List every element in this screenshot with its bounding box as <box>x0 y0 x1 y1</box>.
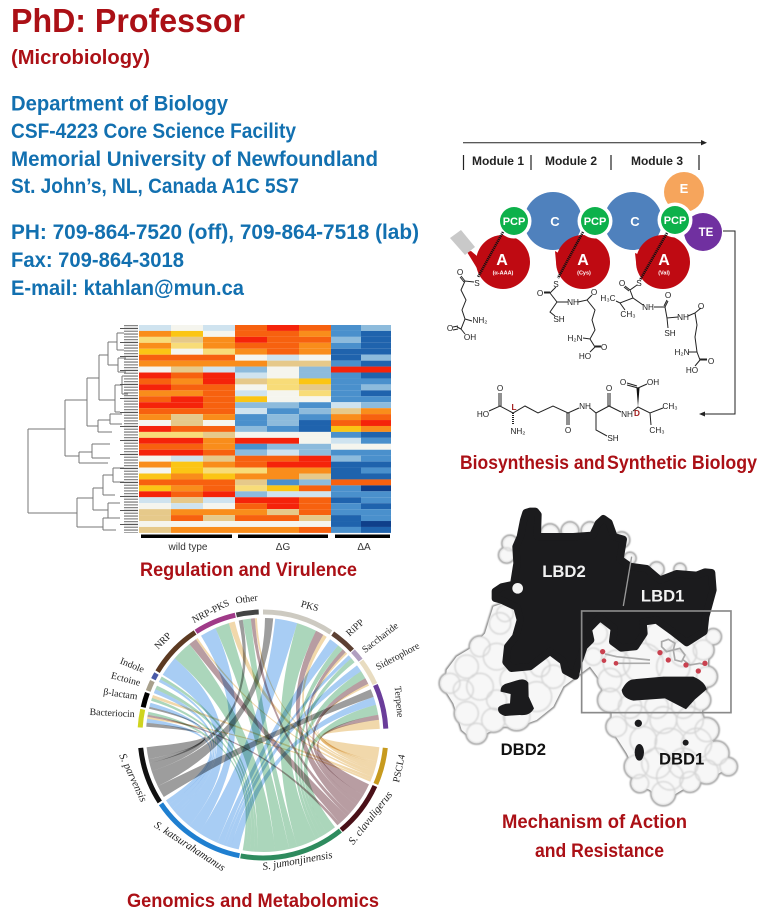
structure: module 3 intermediate: HO <box>686 366 698 375</box>
structure: module 2 intermediate: S <box>553 280 559 289</box>
domain labels: DBD1 <box>659 749 704 768</box>
structure: final product: D <box>634 409 640 418</box>
domain divider <box>623 557 632 606</box>
panel: genomics and metabolomics <box>89 592 422 912</box>
chart: outer track segments <box>140 612 386 858</box>
protein surface <box>440 523 737 805</box>
heading: genomics and metabolomics: Genomics and Metabolomics <box>127 891 379 912</box>
heading: biosynthesis and synthetic biology <box>460 453 757 474</box>
structure: module 1 intermediate: S <box>474 279 480 288</box>
domain letters: C <box>550 214 560 229</box>
domain letters: (Cys) <box>577 270 591 276</box>
chart labels: RiPP <box>344 617 367 639</box>
black cross-section: LBD lower <box>622 677 707 709</box>
structure: module 2 intermediate: H₂N <box>567 334 583 343</box>
text block: contact details: E-mail: ktahlan@mun.ca <box>11 277 244 300</box>
chart labels: S. jumonjinensis <box>262 849 333 873</box>
phosphopantetheine arms <box>478 232 667 280</box>
protein structure <box>440 511 737 805</box>
icon: TE domain <box>684 213 722 251</box>
PCP white halos <box>496 202 692 238</box>
panel: biosynthesis and synthetic biology <box>447 140 757 474</box>
structure: final product <box>477 378 678 443</box>
icon: PCP domains: PCP <box>584 216 606 228</box>
text block: address: St. John’s, NL, Canada A1C 5S7 <box>11 175 299 198</box>
domain letters: C <box>630 214 640 229</box>
chart labels: Siderophore <box>374 640 422 673</box>
icon: E domain <box>664 172 704 212</box>
domain labels: LBD1 <box>641 587 684 606</box>
chart labels: NRP-PKS <box>190 598 231 626</box>
structure: final product: OH <box>647 378 659 387</box>
chart labels: Ectoine <box>110 670 142 689</box>
domain letters: TE <box>699 227 714 239</box>
title: PhD: Professor <box>11 2 245 39</box>
module ticks <box>464 155 699 170</box>
structure: final product: CH₃ <box>662 402 678 411</box>
text block: address: CSF-4223 Core Science Facility <box>11 120 296 143</box>
heading: mechanism of action and resistance: and Resistance <box>535 841 664 862</box>
structure: module 1 intermediate: NH₂ <box>472 316 488 325</box>
module labels <box>472 154 683 168</box>
structure: module 1 intermediate: O <box>447 324 453 333</box>
chart labels: PKS <box>300 599 320 614</box>
chart labels: β-lactam <box>103 687 138 702</box>
module labels: Module 3 <box>631 154 683 168</box>
structure: module 2 intermediate: NH <box>567 298 579 307</box>
panel: regulation and virulence <box>28 325 391 581</box>
domain labels: LBD2 <box>542 562 586 581</box>
axis labels <box>168 542 371 553</box>
chart labels: S. parvensis <box>116 752 149 804</box>
black cross-section: LBD <box>495 511 713 676</box>
structure: module 3 intermediate: NH <box>642 303 654 312</box>
chart: chord ribbons <box>146 618 380 852</box>
chart: dendrogram <box>28 325 131 533</box>
chart: heatmap <box>139 325 391 533</box>
ligand <box>600 639 708 674</box>
structure: module 1 intermediate: O <box>457 268 463 277</box>
icon: red A domains <box>467 235 690 289</box>
icon: grey substrate block <box>450 230 475 255</box>
domain labels <box>501 562 704 768</box>
heading: mechanism of action and resistance: Mechanism of Action <box>502 812 687 833</box>
icon: PCP domains: PCP <box>503 216 525 228</box>
text block: contact details: Fax: 709-864-3018 <box>11 249 184 272</box>
structure: final product: NH <box>621 410 633 419</box>
structure: module 2 intermediate <box>537 280 607 361</box>
axis labels: wild type <box>168 542 208 553</box>
structure: module 1 intermediate: OH <box>464 333 476 342</box>
structure: module 3 intermediate: H₂N <box>674 348 690 357</box>
chart labels: Indole <box>118 656 146 676</box>
icon: C domains <box>524 192 662 250</box>
structure: final product: O <box>620 378 626 387</box>
chart labels: Saccharide <box>360 620 401 656</box>
domain letters: A <box>496 252 508 269</box>
structure: final product: L <box>511 403 517 412</box>
structure: final product: NH₂ <box>510 427 526 436</box>
structure: module 2 intermediate: O <box>537 289 543 298</box>
structure: final product: O <box>606 384 612 393</box>
chart labels: PSCL4 <box>391 753 408 783</box>
heading: mechanism of action and resistance <box>502 812 687 862</box>
binding site box <box>582 611 731 713</box>
text block: contact details: PH: 709-864-7520 (off), 709-864-7518 (lab) <box>11 221 419 244</box>
structure: module 3 intermediate: O <box>665 291 671 300</box>
structure: module 3 intermediate: NH <box>677 313 689 322</box>
chart labels: Other <box>235 592 259 607</box>
structure: module 3 intermediate: SH <box>664 329 676 338</box>
black cross-section: DBD2 <box>498 679 534 716</box>
domain letters: (α-AAA) <box>493 270 514 276</box>
structure: final product: NH <box>579 402 591 411</box>
chart labels: NRP <box>153 630 174 652</box>
black cavities <box>635 720 689 761</box>
domain letters <box>493 181 714 276</box>
white pocket in LBD <box>512 583 523 594</box>
domain letters: A <box>577 252 589 269</box>
icon: PCP domains: PCP <box>664 215 686 227</box>
domain labels: DBD2 <box>501 740 546 759</box>
text block: address <box>11 92 378 198</box>
structure: final product: SH <box>607 434 619 443</box>
structure: module 3 intermediate: CH₃ <box>620 310 636 319</box>
arrow: assembly line direction <box>463 140 707 145</box>
structure: final product: O <box>497 384 503 393</box>
structure: module 3 intermediate: O <box>619 279 625 288</box>
structure: module 2 intermediate: O <box>601 343 607 352</box>
chart labels: Bacteriocin <box>89 707 135 720</box>
axis labels: ΔG <box>276 542 290 553</box>
structure: module 2 intermediate: O <box>591 288 597 297</box>
structure: final product: CH₃ <box>649 426 665 435</box>
group bars <box>141 534 390 538</box>
heading: regulation and virulence: Regulation and Virulence <box>140 560 357 581</box>
heading: biosynthesis and synthetic biology: Biosynthesis and <box>460 453 605 474</box>
panel: mechanism of action and resistance <box>440 511 737 862</box>
chart labels <box>89 592 422 874</box>
structure: module 3 intermediate <box>600 279 714 375</box>
text block: address: Department of Biology <box>11 92 228 116</box>
structure: module 3 intermediate: O <box>698 302 704 311</box>
chart labels: S. clavuligerus <box>346 789 395 847</box>
structure: final product: O <box>565 426 571 435</box>
heading: biosynthesis and synthetic biology: Synthetic Biology <box>607 453 757 474</box>
chart labels: S. katsurahamanus <box>152 819 227 874</box>
domain letters: E <box>680 181 689 196</box>
chart labels: Terpene <box>392 686 405 719</box>
domain letters: A <box>658 252 670 269</box>
domain letters: (Val) <box>658 270 670 276</box>
structure: module 3 intermediate: S <box>636 279 642 288</box>
structure: module 2 intermediate: HO <box>579 352 591 361</box>
structure: module 3 intermediate: H₃C <box>600 294 616 303</box>
module labels: Module 2 <box>545 154 597 168</box>
structure: module 2 intermediate: SH <box>553 315 565 324</box>
structure: module 3 intermediate: O <box>708 357 714 366</box>
structure: module 1 intermediate <box>447 268 488 342</box>
axis labels: ΔA <box>357 542 371 553</box>
icon: PCP domains <box>500 206 689 235</box>
structure: final product: HO <box>477 410 489 419</box>
text block: address: Memorial University of Newfoundland <box>11 148 378 171</box>
subtitle: (Microbiology) <box>11 47 150 69</box>
arrow: product release <box>699 231 735 416</box>
text block: contact details <box>11 221 419 300</box>
module labels: Module 1 <box>472 154 524 168</box>
